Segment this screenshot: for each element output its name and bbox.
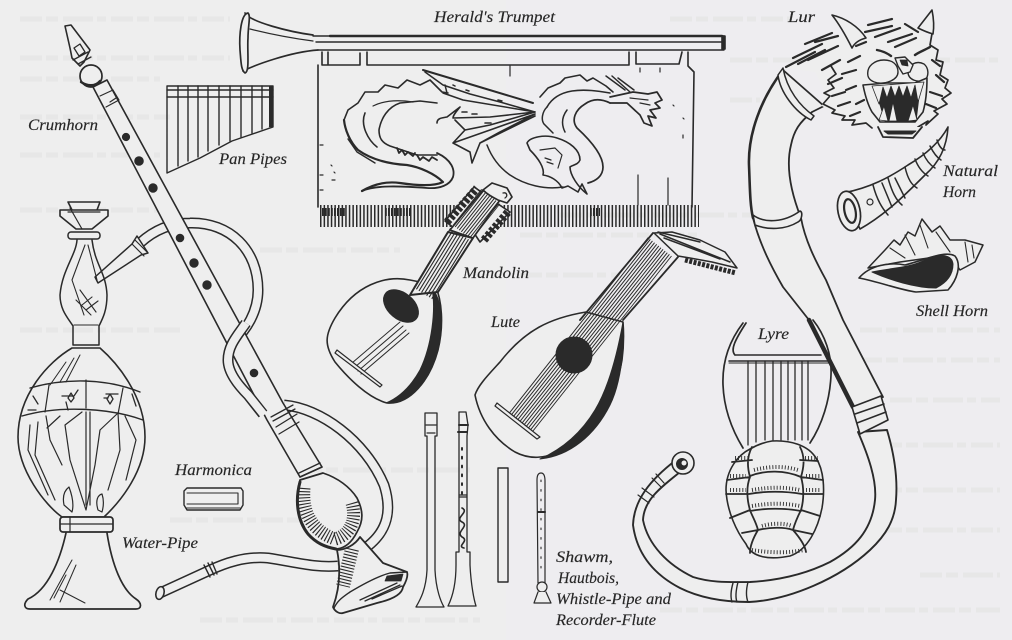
trumpet bell: [243, 13, 318, 71]
harmonica body: [184, 488, 243, 510]
instrument: natural horn: [834, 127, 948, 233]
label: Shawm, Hautbois, Whistle-Pipe and Recorder-Flute: [555, 549, 672, 629]
water-pipe bowl: [60, 202, 108, 229]
instrument: harmonica: [184, 488, 243, 510]
trumpet tube: [313, 36, 724, 50]
shell spikes: [868, 219, 983, 270]
mandolin body: [327, 279, 442, 403]
hautbois finger holes: [461, 448, 463, 498]
shell aperture: [872, 255, 953, 288]
dragon neck and head: [540, 75, 613, 107]
label: Shell Horn: Shell Horn: [916, 303, 988, 320]
right ear: [918, 10, 934, 34]
label: Harmonica: Harmonica: [174, 462, 252, 479]
teeth: [872, 82, 924, 121]
lyre shell hatching: [730, 458, 820, 552]
label line: Natural: Natural: [942, 163, 999, 180]
instrument: crumhorn: [65, 25, 322, 477]
water-pipe egg body: [18, 348, 145, 517]
lute sound hole: [556, 337, 592, 373]
recorder foot: [537, 582, 547, 592]
label: Water-Pipe: Water-Pipe: [122, 535, 198, 552]
lyre strings: [748, 361, 808, 445]
eyes: [877, 47, 930, 56]
label line: Hautbois: Hautbois,: [557, 570, 619, 587]
mane outline: [823, 28, 951, 128]
mandolin strings on body: [352, 322, 409, 374]
shell lip: [859, 254, 958, 292]
lower jaw: [878, 127, 922, 138]
label line: Recorder-Flute: Recorder-Flute: [555, 612, 656, 629]
mane: [785, 18, 951, 128]
instrument: hautbois: [448, 412, 476, 606]
label: Pan Pipes: Pan Pipes: [218, 151, 287, 168]
horn mouth: [834, 189, 864, 233]
water-pipe ferrule: [95, 236, 148, 283]
label line: Shawm: Shawm,: [556, 549, 613, 566]
dragon tail and body: [344, 80, 448, 120]
lute body: [475, 312, 624, 457]
lyre tortoise shell: [726, 441, 824, 558]
lyre left arm: [723, 323, 746, 448]
lute pegbox: [654, 232, 737, 268]
label: Lyre: Lyre: [757, 326, 789, 343]
bulb: [297, 473, 362, 549]
instrument: shell horn: [859, 219, 983, 292]
recorder tube: [537, 473, 545, 583]
lur mouthpiece: [672, 452, 694, 474]
instrument: lur: [633, 10, 951, 602]
hautbois tube and bell: [448, 412, 476, 606]
shawm tube and bell: [416, 413, 444, 607]
lur middle band: [753, 211, 802, 228]
mandolin scroll: [483, 183, 512, 203]
label: Lur: Lur: [787, 9, 816, 26]
instrument: banner with dragon: [318, 52, 699, 216]
mane hatching: [786, 19, 944, 116]
instrument: recorder-flute: [534, 473, 551, 603]
lur beast head: [785, 10, 951, 138]
water-pipe neck bulb: [60, 240, 107, 345]
water-pipe upper tube: [140, 223, 258, 340]
instrument: herald's trumpet: [240, 13, 725, 73]
lur upper tube: [749, 70, 883, 407]
instrument: pan pipes: [167, 86, 273, 173]
crumhorn body: [93, 80, 322, 477]
water-pipe tube loop: [284, 405, 388, 546]
crumhorn reed cap: [65, 25, 90, 66]
hautbois keys: [460, 508, 465, 548]
dragon haunch and claw: [527, 136, 587, 194]
mandolin neck: [410, 232, 473, 295]
water-pipe ring: [68, 232, 100, 239]
mandolin pegbox: [450, 190, 500, 238]
pipes: [167, 86, 273, 173]
label line: Horn: Horn: [942, 184, 976, 201]
mandolin right pegs: [474, 204, 510, 242]
open mouth: [863, 78, 927, 122]
label: Lute: Lute: [490, 314, 520, 331]
lute neck edges: [580, 233, 678, 320]
lute strings and neck: [578, 326, 602, 344]
water-pipe mouthpipe: [160, 558, 338, 593]
water-pipe collar: [60, 517, 113, 532]
banner cloth: [318, 52, 694, 207]
tube crossing: [228, 323, 263, 414]
crumhorn finger holes: [122, 133, 258, 377]
horn body: [843, 127, 948, 229]
label line: Whistle-Pipe and: Whistle-Pipe and: [556, 591, 672, 608]
mandolin left pegs: [445, 187, 483, 228]
crumhorn knob: [80, 65, 102, 87]
lyre crossbars: [729, 355, 831, 361]
instrument: crumhorn bulb and bell: [297, 473, 407, 613]
snout: [895, 57, 913, 74]
instrument: whistle-pipe: [498, 468, 508, 582]
crumhorn bands: [271, 405, 299, 434]
bell: [333, 537, 407, 613]
lur lower collar: [852, 396, 888, 434]
lute bridge: [495, 403, 540, 439]
label: Crumhorn: Crumhorn: [28, 117, 98, 134]
dragon wing: [423, 70, 533, 103]
label: Mandolin: Mandolin: [462, 265, 529, 282]
water-pipe foot: [25, 533, 141, 609]
lyre right arm: [810, 320, 831, 443]
instrument: shawm: [416, 413, 444, 607]
instrument: lyre: [723, 320, 831, 558]
left ear: [832, 15, 866, 48]
water-pipe tube crossing over the crumhorn: [228, 323, 264, 415]
lyre shell scutes: [726, 447, 823, 553]
muzzle: [868, 60, 928, 83]
instrument: water-pipe: [18, 202, 388, 609]
instrument: mandolin: [327, 183, 512, 403]
banner fringe: [320, 205, 699, 227]
label: Herald's Trumpet: Herald's Trumpet: [433, 9, 556, 26]
mandolin sound hole: [377, 283, 425, 329]
label: Natural Horn: [942, 163, 999, 201]
mandolin bridge: [335, 350, 382, 387]
dragon belly: [487, 145, 563, 188]
lur lower tube: [633, 430, 896, 602]
instrument: lute: [475, 232, 737, 459]
lur collar: [778, 68, 814, 120]
